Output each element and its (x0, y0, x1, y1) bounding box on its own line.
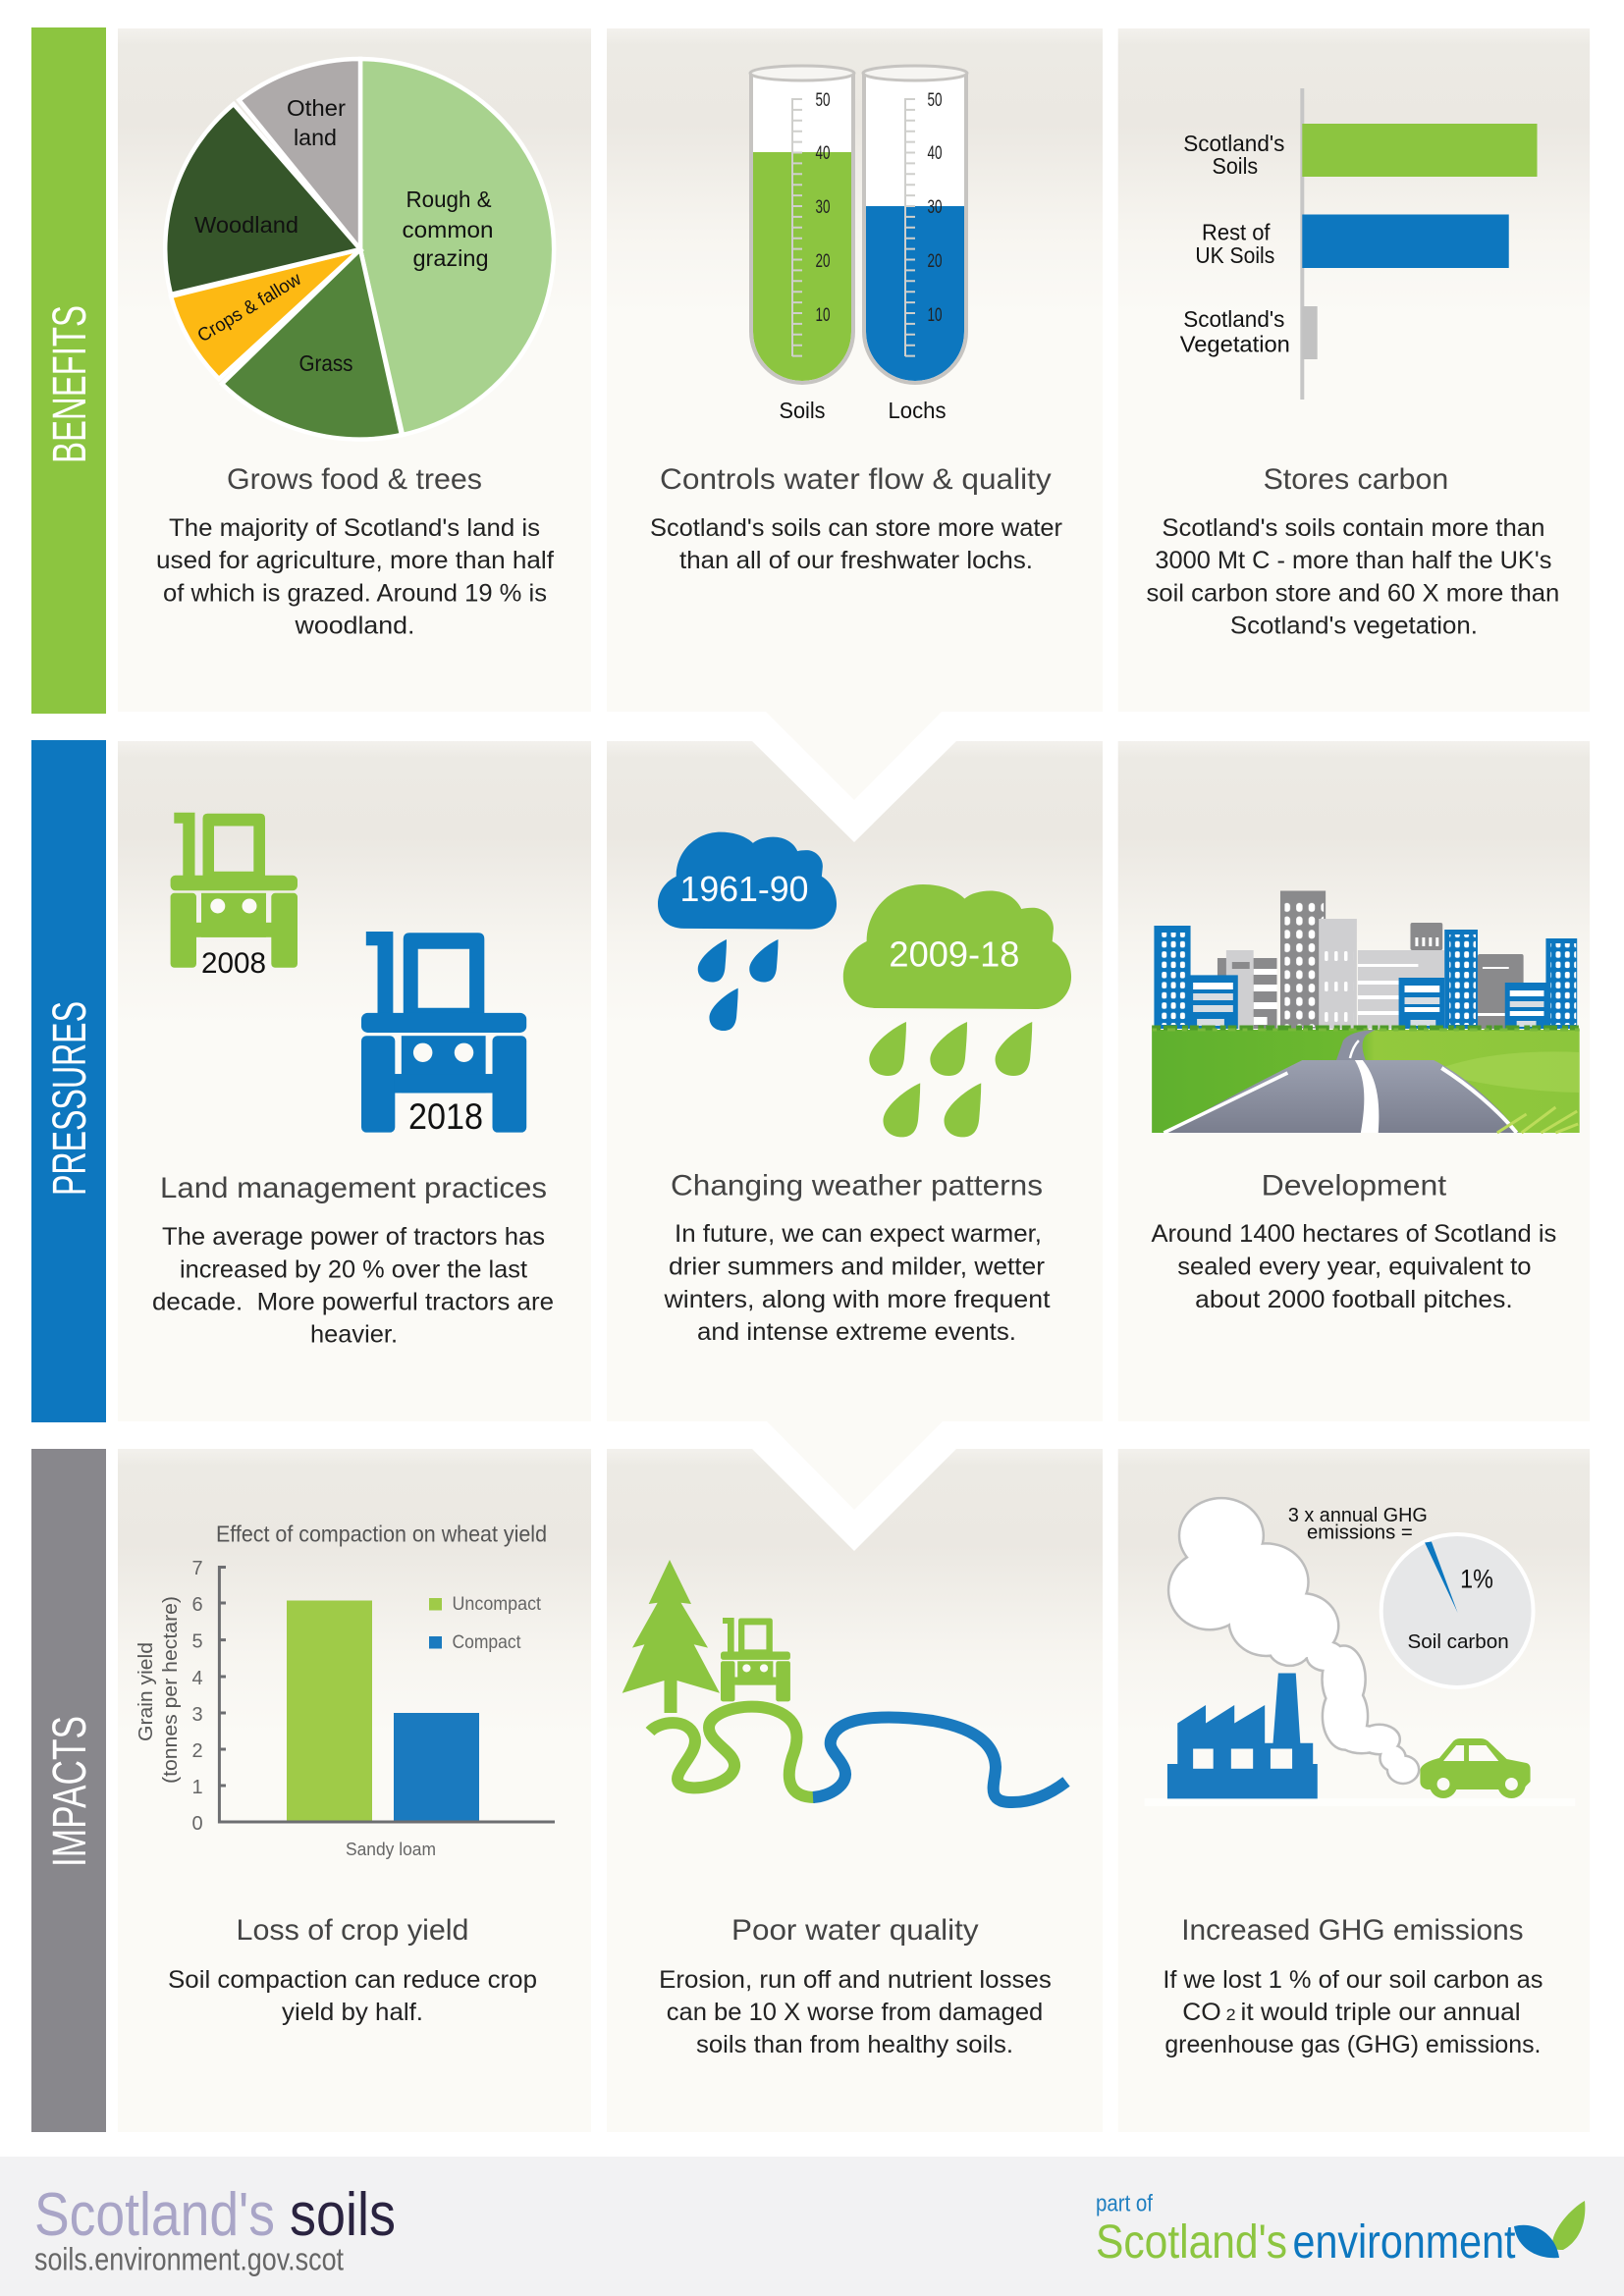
panel: increased GHG emissions (1118, 1449, 1590, 2132)
body text (1163, 1966, 1543, 2058)
test tube: soils: 40 (815, 143, 831, 164)
pie labels: Grass (298, 350, 353, 376)
body text: drier summers and milder, wetter (669, 1253, 1045, 1280)
bar chart: compaction and wheat yield: 4 (191, 1668, 203, 1689)
body text: of which is grazed. Around 19 % is (163, 579, 547, 607)
icon: green cloud 2009-18 (843, 884, 1071, 1009)
bar chart: compaction and wheat yield: 6 (191, 1594, 203, 1616)
test tube: lochs: 10 (927, 305, 943, 326)
bar chart: compaction and wheat yield: Sandy loam (346, 1840, 436, 1859)
pie labels: common (403, 217, 493, 242)
section bar: pressures: PRESSURES (44, 1001, 96, 1196)
panel: poor water quality (607, 1421, 1103, 2132)
bar chart: compaction and wheat yield: Uncompact (452, 1594, 542, 1615)
icon: tree (623, 1560, 720, 1713)
callout: annual emissions: 3 x annual GHG (1288, 1505, 1428, 1526)
logo: part of Scotland's environment (1096, 2191, 1585, 2269)
body text: greenhouse gas (GHG) emissions. (1164, 2031, 1541, 2058)
body text: increased by 20 % over the last (180, 1256, 527, 1284)
heading: Grows food & trees (227, 463, 482, 496)
body text: woodland. (294, 613, 414, 640)
body text (156, 514, 554, 640)
icon: blue tractor 2018 (361, 932, 526, 1133)
test tube: lochs: 20 (927, 251, 943, 272)
body text: CO 2 it would triple our annual (1182, 1999, 1521, 2026)
body text: about 2000 football pitches. (1195, 1286, 1513, 1313)
illustration: river green to blue (650, 1707, 1066, 1802)
pie labels: grazing (412, 245, 489, 271)
bar chart: carbon stores: Scotland's (1183, 306, 1284, 332)
section bar: impacts (31, 1449, 106, 2132)
body text (152, 1223, 554, 1349)
icon: blue cloud 1961-90 (658, 832, 837, 930)
bar chart: compaction and wheat yield: Grain yield (135, 1642, 157, 1741)
section bar: impacts: IMPACTS (44, 1716, 96, 1867)
body text (1151, 1220, 1556, 1313)
body text (168, 1966, 537, 2026)
bar chart: carbon stores: Scotland's (1183, 131, 1284, 156)
section bar: pressures (31, 740, 106, 1422)
panel: changing weather patterns (607, 711, 1103, 1421)
illustration: city and road (1152, 891, 1580, 1133)
body text: decade. More powerful tractors are (152, 1288, 554, 1315)
heading: Poor water quality (731, 1914, 979, 1947)
body text: Around 1400 hectares of Scotland is (1151, 1220, 1556, 1248)
test tube: soils: 10 (815, 305, 831, 326)
body text: If we lost 1 % of our soil carbon as (1163, 1966, 1543, 1994)
bar chart: compaction and wheat yield: 2 (191, 1740, 203, 1762)
body text: used for agriculture, more than half (156, 547, 554, 574)
bar chart: carbon stores: Soils (1212, 153, 1258, 179)
pie labels: Rough & (406, 187, 491, 212)
pie labels: Other (287, 95, 346, 121)
body text (663, 1220, 1051, 1346)
chevron arrow: pressures to impacts (752, 1421, 956, 1551)
body text: Soil compaction can reduce crop (168, 1966, 537, 1994)
callout: annual emissions (1288, 1505, 1428, 1544)
callout: annual emissions: emissions = (1307, 1522, 1413, 1544)
body text: yield by half. (282, 1999, 423, 2026)
test tube: soils: 50 (815, 90, 831, 111)
bar chart: compaction and wheat yield: Compact (452, 1632, 521, 1653)
test tube: soils: 20 (815, 251, 831, 272)
heading: Land management practices (160, 1172, 547, 1204)
body text: sealed every year, equivalent to (1177, 1253, 1532, 1281)
body text: The majority of Scotland's land is (169, 514, 540, 542)
bar chart: compaction and wheat yield: 7 (191, 1558, 203, 1579)
test tube: lochs: 30 (927, 197, 943, 218)
pie chart: land use (165, 59, 554, 440)
body text: winters, along with more frequent (663, 1286, 1051, 1313)
heading: Stores carbon (1264, 463, 1448, 496)
bar chart: compaction and wheat yield: Effect of compaction on wheat yield (216, 1522, 547, 1547)
bar chart: carbon stores: Vegetation (1180, 331, 1290, 357)
icon: factory (1167, 1673, 1318, 1798)
bar chart: compaction and wheat yield: 0 (191, 1813, 203, 1835)
pie: soil carbon 1%: Soil carbon (1407, 1631, 1509, 1653)
tube labels (780, 398, 947, 423)
icon: green cloud 2009-18: 2009-18 (889, 934, 1019, 975)
pie labels: Crops & fallow (194, 269, 305, 347)
icon: blue cloud 1961-90: 1961-90 (679, 869, 809, 909)
body text: than all of our freshwater lochs. (679, 547, 1033, 574)
bar chart: compaction and wheat yield: 3 (191, 1704, 203, 1726)
bar chart: carbon stores: Rest of (1202, 219, 1271, 245)
pie labels: Woodland (194, 212, 298, 238)
label: 2018: 2018 (408, 1096, 483, 1137)
icon: blue rain drops (698, 939, 778, 1031)
icon: green rain drops (869, 1022, 1032, 1137)
heading: Changing weather patterns (671, 1170, 1043, 1201)
test tube: lochs (863, 66, 967, 383)
panel: stores carbon (1118, 28, 1590, 712)
logo: part of Scotland's environment: part of (1096, 2191, 1153, 2216)
tube labels: Soils (780, 398, 825, 423)
body text: soils than from healthy soils. (696, 2031, 1013, 2058)
icon: car (1420, 1738, 1531, 1798)
body text: In future, we can expect warmer, (675, 1220, 1042, 1248)
bar chart: compaction and wheat yield (135, 1522, 555, 1859)
illustration: smoke plume (1169, 1499, 1418, 1783)
icon: small tractor (721, 1618, 790, 1701)
body text: can be 10 X worse from damaged (667, 1999, 1043, 2026)
label: 2008: 2008 (201, 947, 266, 980)
pie labels (194, 95, 493, 376)
test tube: lochs: 50 (927, 90, 943, 111)
test tube: lochs: 40 (927, 143, 943, 164)
body text (659, 1966, 1052, 2058)
body text: and intense extreme events. (697, 1318, 1016, 1346)
body text: 3000 Mt C - more than half the UK's (1155, 547, 1551, 574)
panel: development (1118, 741, 1590, 1421)
pie labels: land (294, 125, 337, 150)
bar chart: carbon stores: UK Soils (1195, 242, 1274, 268)
bar chart: compaction and wheat yield: 1 (191, 1777, 203, 1798)
bar chart: compaction and wheat yield: 5 (191, 1631, 203, 1653)
heading: Development (1262, 1169, 1447, 1202)
section bar: benefits: BENEFITS (44, 305, 96, 463)
test tube: soils (750, 66, 854, 383)
test tube: soils: 30 (815, 197, 831, 218)
chevron arrow: benefits to pressures (752, 711, 956, 842)
body text: Scotland's soils can store more water (650, 514, 1062, 542)
body text: Erosion, run off and nutrient losses (659, 1966, 1052, 1994)
body text: Scotland's soils contain more than (1162, 514, 1544, 542)
body text (650, 514, 1062, 574)
website address: soils.environment.gov.scot (34, 2242, 344, 2277)
panel: land management practices (118, 741, 591, 1421)
body text: heavier. (310, 1321, 398, 1349)
heading: Loss of crop yield (236, 1914, 469, 1947)
pie: soil carbon 1% (1381, 1534, 1534, 1687)
logo: Scotland's soils: Scotland's (34, 2181, 275, 2249)
panel: loss of crop yield (118, 1449, 591, 2132)
body text (1146, 514, 1559, 640)
panel: grows food and trees (118, 28, 591, 712)
pie: soil carbon 1%: 1% (1460, 1564, 1493, 1594)
section bar: benefits (31, 27, 106, 714)
icon: green tractor 2008 (171, 813, 298, 968)
bar chart: carbon stores (1180, 88, 1538, 400)
logo: part of Scotland's environment: Scotland's (1096, 2216, 1287, 2269)
body text: soil carbon store and 60 X more than (1146, 579, 1559, 608)
logo: Scotland's soils: soils (290, 2181, 396, 2249)
panel: controls water flow and quality (607, 28, 1103, 712)
logo: part of Scotland's environment: environment (1292, 2216, 1516, 2269)
footer band (0, 2157, 1624, 2296)
body text: Scotland's vegetation. (1230, 612, 1478, 640)
body text: The average power of tractors has (162, 1223, 545, 1251)
heading: Increased GHG emissions (1181, 1914, 1524, 1947)
heading: Controls water flow & quality (660, 463, 1052, 496)
tube labels: Lochs (888, 398, 947, 423)
bar chart: compaction and wheat yield: (tonnes per hectare) (160, 1596, 182, 1784)
